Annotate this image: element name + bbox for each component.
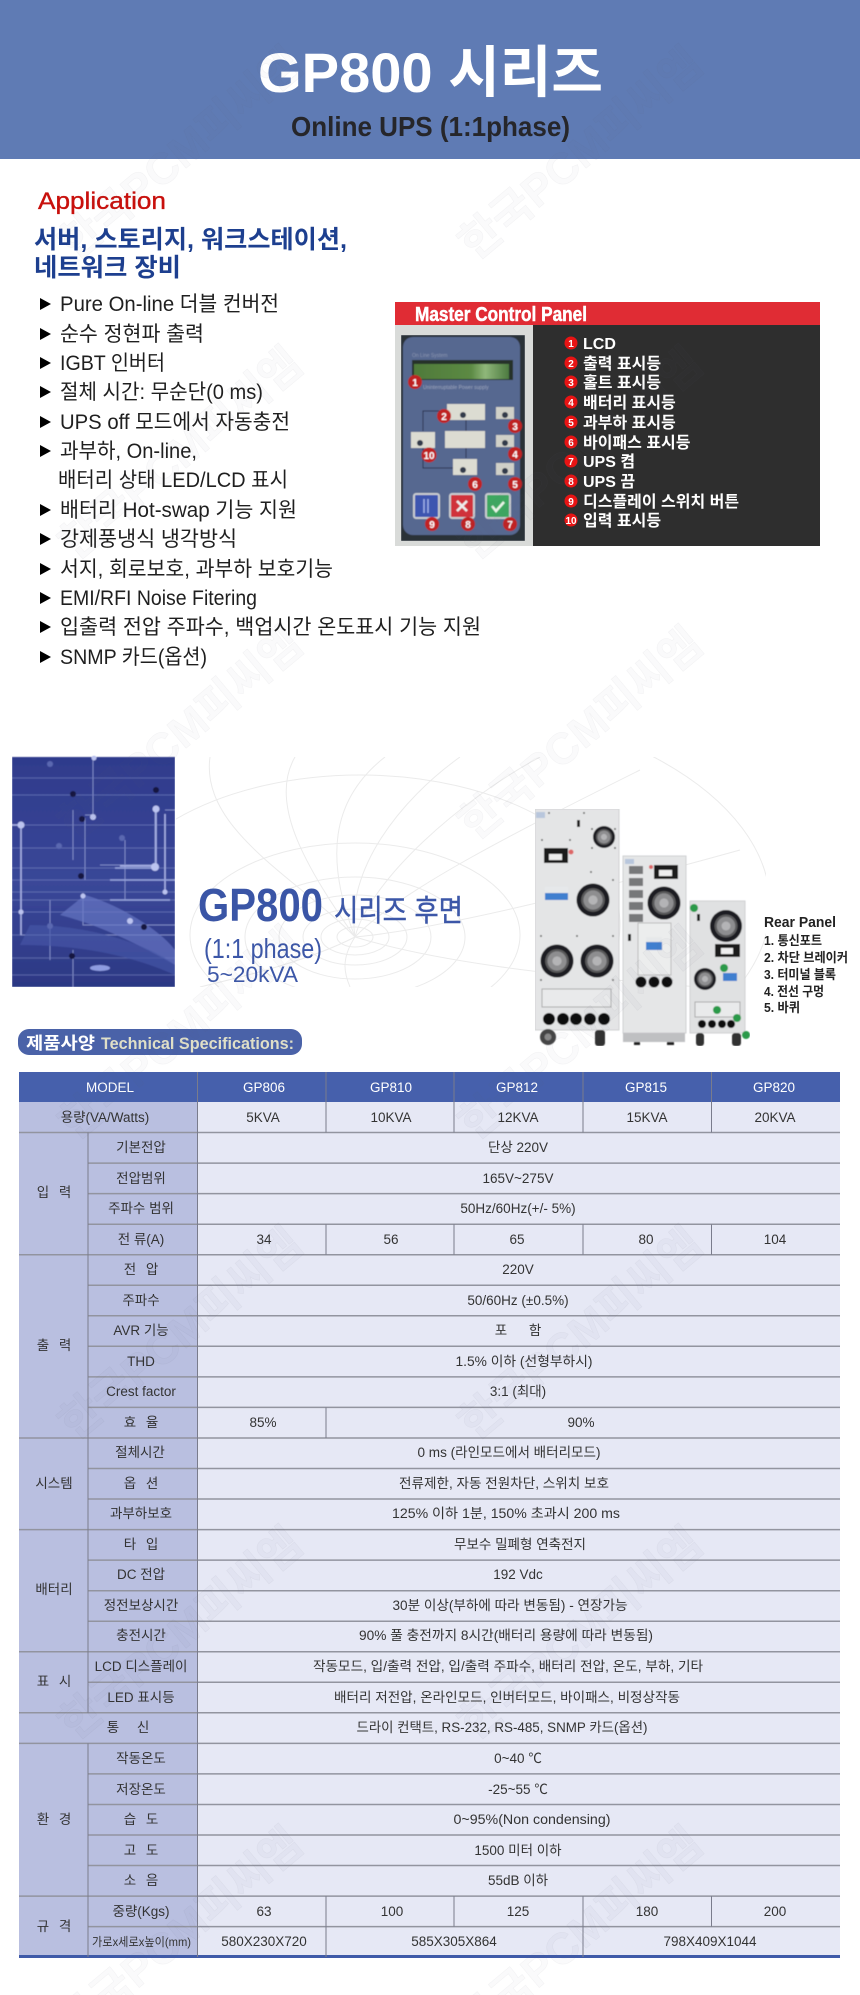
panel legend: [564, 336, 739, 530]
input group: 50Hz/60Hz(+/- 5%): [460, 1201, 576, 1216]
number badges on device: [408, 375, 522, 531]
input group: 56: [383, 1232, 399, 1247]
display group: 표 시: [37, 1674, 71, 1689]
environment group: 0~40 ℃: [494, 1751, 542, 1766]
watermarks: 한국PCM피씨엠: [450, 919, 711, 1149]
panel legend: 홀트 표시등: [583, 374, 661, 392]
display group: LCD 디스플레이: [95, 1659, 187, 1674]
rear section title: [198, 879, 463, 987]
UPS unit: medium: [623, 856, 686, 1045]
capacity row: 용량(VA/Watts): [61, 1110, 149, 1125]
output group: Crest factor: [106, 1384, 176, 1399]
system group: 0 ms (라인모드에서 배터리모드): [418, 1445, 600, 1460]
environment group: -25~55 ℃: [488, 1782, 548, 1797]
battery group: DC 전압: [117, 1567, 165, 1582]
input group: 입 력: [37, 1185, 71, 1200]
battery group: 192 Vdc: [493, 1567, 543, 1582]
rear panel legend: 4. 전선 구멍: [764, 984, 824, 999]
battery group: 무보수 밀폐형 연축전지: [454, 1537, 586, 1552]
environment group: 1500 미터 이하: [474, 1843, 562, 1858]
UPS rear photos: [535, 809, 750, 1046]
environment group: 습 도: [124, 1812, 158, 1827]
environment group: 저장온도: [116, 1782, 166, 1797]
environment group: 환 경: [37, 1812, 71, 1827]
panel legend: 8: [568, 477, 574, 488]
rear panel legend: 3. 터미널 블록: [764, 967, 836, 982]
display group: 배터리 저전압, 온라인모드, 인버터모드, 바이패스, 비정상작동: [334, 1690, 680, 1705]
rear section title: 시리즈 후면: [334, 895, 463, 928]
feature list: IGBT 인버터: [60, 352, 165, 375]
system group: 125% 이하 1분, 150% 초과시 200 ms: [392, 1506, 620, 1521]
panel legend: 10: [565, 516, 577, 527]
UPS unit: large: [535, 809, 619, 1046]
watermarks: 한국PCM피씨엠: [50, 619, 311, 849]
display group: [37, 1659, 704, 1705]
input group: 34: [256, 1232, 272, 1247]
dimensions group: 가로x세로x높이(mm): [92, 1935, 191, 1949]
environment group: 소 음: [124, 1873, 158, 1888]
output group: 포 함: [495, 1323, 541, 1338]
system group: 옵 션: [124, 1476, 158, 1491]
header row: GP820: [753, 1080, 795, 1095]
system group: 전류제한, 자동 전원차단, 스위치 보호: [399, 1476, 609, 1491]
watermarks: 한국PCM피씨엠: [450, 1519, 711, 1749]
dimensions group: 125: [507, 1904, 529, 1919]
communication row: 통 신: [107, 1720, 149, 1735]
panel legend: 배터리 표시등: [583, 394, 676, 412]
specifications table: [19, 1072, 840, 1958]
control panel device: On Line System: [412, 353, 448, 359]
feature list: 서지, 회로보호, 과부하 보호기능: [60, 558, 333, 581]
display group: LED 표시등: [107, 1690, 175, 1705]
dimensions group: 585X305X864: [411, 1934, 497, 1949]
panel legend: LCD: [583, 336, 616, 353]
output group: 90%: [567, 1415, 595, 1430]
dimensions group: 중량(Kgs): [112, 1904, 170, 1919]
output group: THD: [127, 1354, 155, 1369]
capacity row: 12KVA: [497, 1110, 539, 1125]
capacity row: 5KVA: [246, 1110, 280, 1125]
rear panel legend: 2. 차단 브레이커: [764, 950, 848, 965]
battery group: [35, 1537, 653, 1643]
feature list: 입출력 전압 주파수, 백업시간 온도표시 기능 지원: [60, 616, 481, 639]
input group: 104: [764, 1232, 787, 1247]
title: GP800 시리즈: [258, 41, 603, 104]
panel legend: 디스플레이 스위치 버튼: [583, 493, 739, 511]
input group: [37, 1140, 787, 1247]
output group: 50/60Hz (±0.5%): [467, 1293, 569, 1308]
battery group: 배터리: [35, 1582, 73, 1597]
dimensions group: 100: [381, 1904, 403, 1919]
watermarks: 한국PCM피씨엠: [450, 39, 711, 269]
capacity row: 20KVA: [754, 1110, 796, 1125]
number badges on device: 7: [507, 520, 513, 531]
rear panel legend: 5. 바퀴: [764, 1000, 800, 1015]
environment group: 작동온도: [116, 1751, 166, 1766]
number badges on device: 8: [465, 520, 471, 531]
watermarks: 한국PCM피씨엠: [50, 919, 311, 1149]
panel legend: 4: [568, 398, 574, 409]
output group: [37, 1262, 595, 1430]
rear panel legend: [764, 914, 848, 1015]
subtitle: Online UPS (1:1phase): [291, 111, 570, 142]
header row: GP806: [243, 1080, 285, 1095]
environment group: [37, 1751, 610, 1888]
application heading: Application: [38, 188, 166, 215]
application targets: [34, 226, 347, 282]
input group: 전압범위: [116, 1171, 166, 1186]
output group: 출 력: [37, 1338, 71, 1353]
environment group: 55dB 이하: [488, 1873, 549, 1888]
panel legend: 5: [568, 418, 574, 429]
battery group: 정전보상시간: [104, 1598, 178, 1613]
display group: 작동모드, 입/출력 전압, 입/출력 주파수, 배터리 전압, 온도, 부하, 기타: [313, 1659, 704, 1674]
watermarks: 한국PCM피씨엠: [50, 1519, 311, 1749]
number badges on device: 9: [429, 520, 435, 531]
header row: [86, 1080, 795, 1095]
watermarks: [50, 39, 711, 1995]
input group: 전 류(A): [118, 1232, 164, 1247]
output group: 85%: [249, 1415, 277, 1430]
control panel device: Uninterruptable Power supply: [423, 385, 489, 391]
capacity row: [61, 1110, 796, 1125]
feature list: 배터리 상태 LED/LCD 표시: [58, 469, 288, 492]
number badges on device: 4: [512, 450, 518, 461]
number badges on device: 3: [512, 422, 518, 433]
circuit board image: [12, 756, 175, 987]
table backgrounds: [19, 1072, 840, 1958]
dimensions group: [37, 1904, 786, 1949]
header banner: [0, 0, 860, 159]
rear section title: (1:1 phase): [204, 933, 322, 964]
panel legend: 1: [568, 339, 574, 350]
system group: [35, 1445, 620, 1521]
feature list: UPS off 모드에서 자동충전: [60, 411, 290, 434]
panel: master control panel: [395, 302, 820, 546]
system group: 과부하보호: [110, 1506, 172, 1521]
communication row: 드라이 컨택트, RS-232, RS-485, SNMP 카드(옵션): [356, 1720, 648, 1735]
environment group: 0~95%(Non condensing): [454, 1812, 610, 1827]
output group: 효 율: [124, 1415, 158, 1430]
system group: 시스템: [35, 1476, 73, 1491]
watermarks: 한국PCM피씨엠: [450, 619, 711, 849]
feature list: 순수 정현파 출력: [60, 323, 204, 346]
panel legend: 입력 표시등: [583, 512, 661, 530]
application targets: 네트워크 장비: [34, 254, 181, 282]
output group: 220V: [502, 1262, 534, 1277]
rear panel legend: Rear Panel: [764, 914, 836, 931]
panel legend: 7: [568, 457, 574, 468]
number badges on device: 6: [472, 480, 478, 491]
UPS unit: small: [690, 901, 750, 1046]
panel legend: 출력 표시등: [583, 355, 661, 373]
capacity row: 10KVA: [370, 1110, 412, 1125]
environment group: 고 도: [124, 1843, 158, 1858]
communication row: [107, 1720, 648, 1735]
output group: AVR 기능: [113, 1323, 169, 1338]
panel legend: UPS 끔: [583, 474, 635, 491]
dimensions group: 580X230X720: [221, 1934, 307, 1949]
dimensions group: 798X409X1044: [663, 1934, 757, 1949]
battery group: 타 입: [124, 1537, 158, 1552]
number badges on device: 2: [441, 412, 447, 423]
specifications heading pill: Technical Specifications:: [101, 1034, 294, 1053]
watermarks: 한국PCM피씨엠: [50, 39, 311, 269]
battery group: 90% 풀 충전까지 8시간(배터리 용량에 따라 변동됨): [359, 1628, 653, 1643]
specifications heading pill: 제품사양: [26, 1034, 95, 1053]
watermarks: 한국PCM피씨엠: [450, 339, 711, 569]
header row: MODEL: [86, 1080, 134, 1095]
output group: 1.5% 이하 (선형부하시): [456, 1354, 592, 1369]
panel legend: 바이패스 표시등: [583, 434, 691, 452]
header row: GP810: [370, 1080, 412, 1095]
feature list: 강제풍냉식 냉각방식: [60, 528, 237, 551]
number badges on device: 1: [412, 378, 418, 389]
watermarks: 한국PCM피씨엠: [450, 1219, 711, 1449]
number badges on device: 10: [423, 451, 435, 462]
feature list: 과부하, On-line,: [60, 440, 197, 463]
rear section title: GP800: [198, 879, 323, 931]
feature list: SNMP 카드(옵션): [60, 646, 207, 669]
panel legend: 9: [568, 497, 574, 508]
feature list: EMI/RFI Noise Fitering: [60, 587, 257, 610]
dimensions group: 200: [764, 1904, 786, 1919]
battery group: 충전시간: [116, 1628, 166, 1643]
battery group: 30분 이상(부하에 따라 변동됨) - 연장가능: [392, 1598, 628, 1613]
feature list: [40, 293, 481, 669]
panel legend: 2: [568, 359, 574, 370]
panel legend: 6: [568, 438, 574, 449]
panel legend: 과부하 표시등: [583, 414, 676, 432]
header row: GP815: [625, 1080, 667, 1095]
header row: GP812: [496, 1080, 538, 1095]
input group: 165V~275V: [483, 1171, 553, 1186]
input group: 80: [638, 1232, 654, 1247]
panel legend: UPS 켬: [583, 453, 635, 471]
panel legend: 3: [568, 378, 574, 389]
feature list: 배터리 Hot-swap 기능 지원: [60, 499, 297, 522]
output group: 주파수: [122, 1293, 160, 1308]
watermarks: 한국PCM피씨엠: [50, 339, 311, 569]
application targets: 서버, 스토리지, 워크스테이션,: [34, 226, 347, 254]
panel heading: Master Control Panel: [415, 304, 587, 326]
number badges on device: 5: [512, 480, 518, 491]
system group: 절체시간: [115, 1445, 165, 1460]
dimensions group: 180: [636, 1904, 658, 1919]
dimensions group: 63: [256, 1904, 272, 1919]
capacity row: 15KVA: [626, 1110, 668, 1125]
decorative grid globe background: [176, 757, 766, 987]
input group: 65: [509, 1232, 525, 1247]
output group: 전 압: [124, 1262, 158, 1277]
rear panel legend: 1. 통신포트: [764, 933, 822, 948]
feature list: Pure On-line 더블 컨버전: [60, 293, 279, 316]
input group: 단상 220V: [488, 1140, 548, 1155]
rear section title: 5~20kVA: [207, 962, 298, 987]
specifications heading pill: [18, 1029, 302, 1055]
output group: 3:1 (최대): [490, 1384, 546, 1399]
control panel device: [401, 335, 525, 541]
feature list: 절체 시간: 무순단(0 ms): [60, 381, 263, 404]
input group: 기본전압: [116, 1140, 166, 1155]
watermarks: 한국PCM피씨엠: [50, 1219, 311, 1449]
dimensions group: 규 격: [37, 1919, 71, 1934]
input group: 주파수 범위: [108, 1201, 174, 1216]
